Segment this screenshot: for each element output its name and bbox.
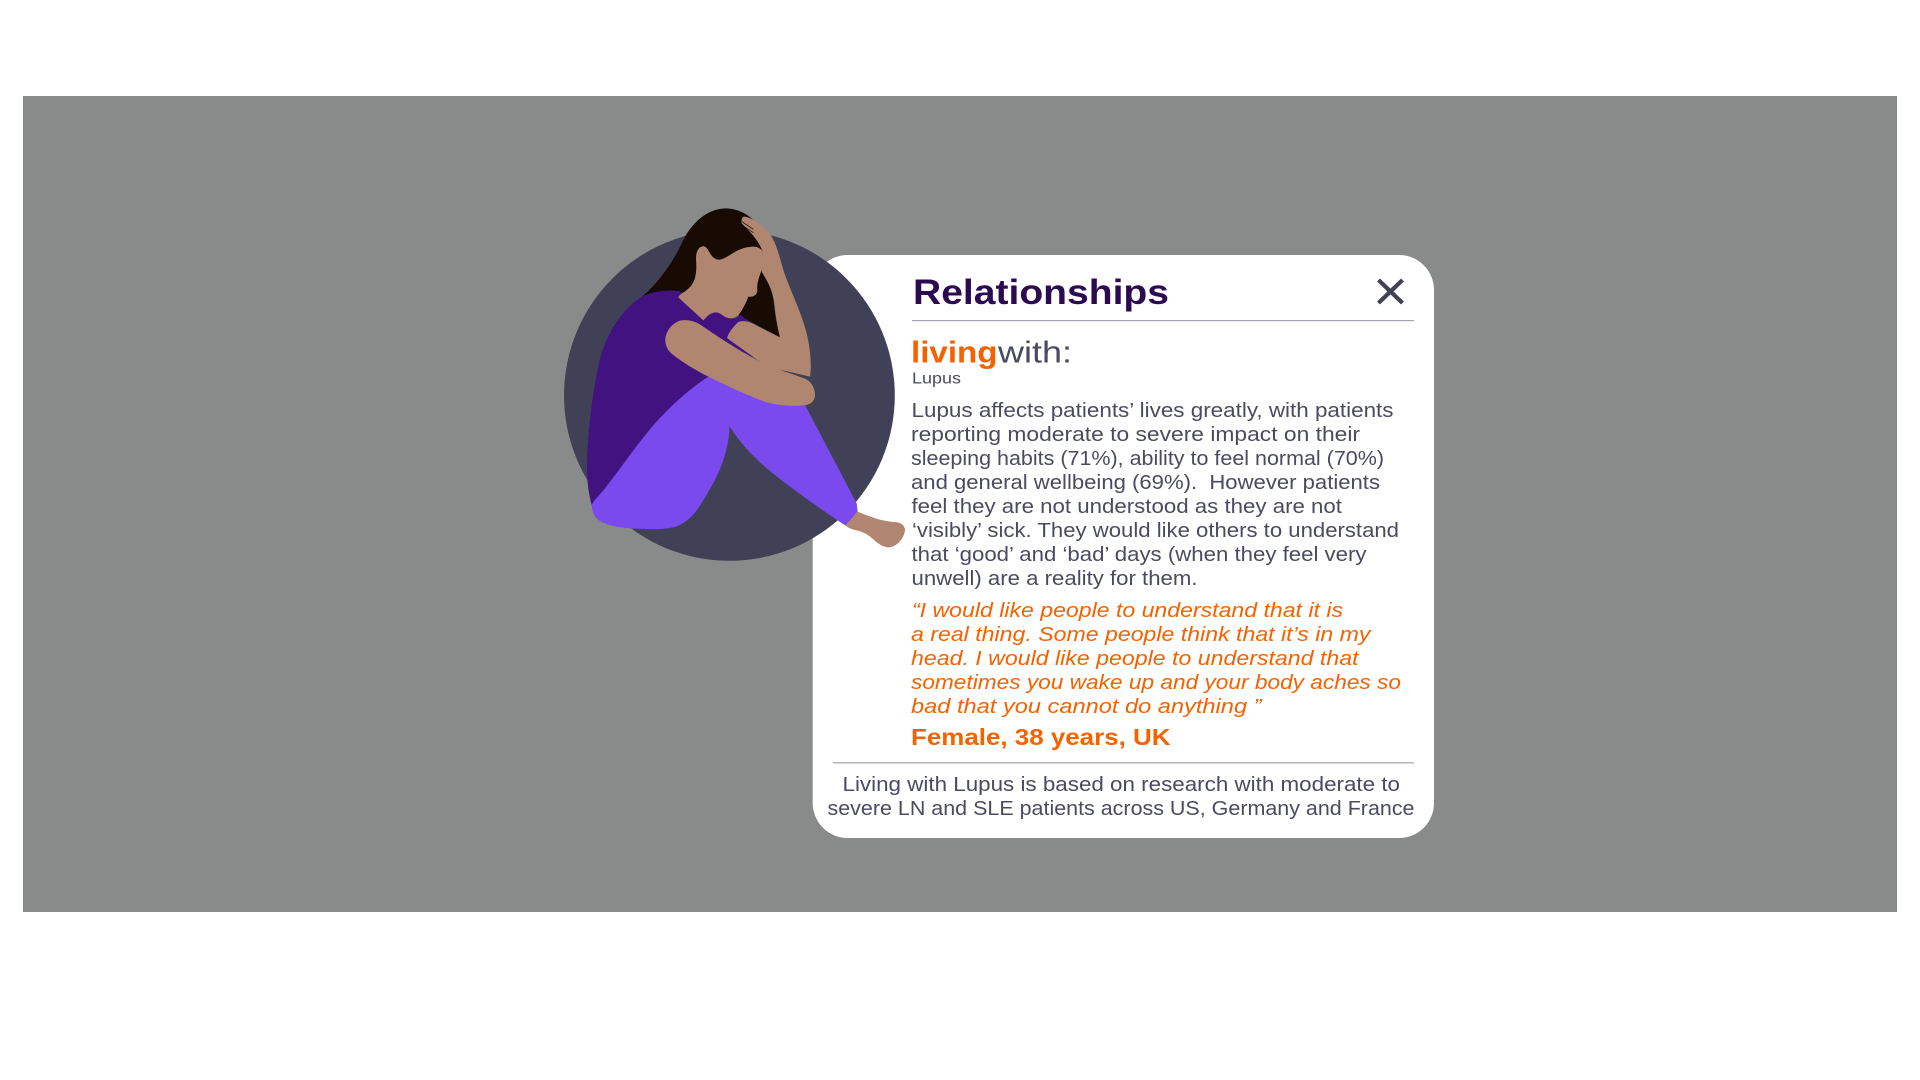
logo text: livingwith <box>911 335 1072 370</box>
icon: close X <box>1378 280 1402 303</box>
logo text: livingwith: with: <box>997 335 1072 370</box>
footer note: Living with Lupus is based on research with moderate to <box>842 773 1400 796</box>
patient quote: a real thing. Some people think that it’s in my <box>911 623 1372 646</box>
footer note: severe LN and SLE patients across US, Germany and France <box>828 797 1414 820</box>
body paragraph <box>911 399 1399 590</box>
body paragraph: ‘visibly’ sick. They would like others to understand <box>912 519 1399 542</box>
heading: Relationships: Relationships <box>913 273 1169 312</box>
face and neck <box>678 246 762 320</box>
folded forearm <box>665 320 815 406</box>
patient quote: head. I would like people to understand that <box>911 647 1360 670</box>
dark circle behind figure <box>564 230 895 561</box>
foot <box>846 512 905 547</box>
patient quote: “I would like people to understand that it is <box>912 599 1343 622</box>
body paragraph: Lupus affects patients’ lives greatly, with patients <box>912 399 1394 422</box>
raised arm and hand on head <box>727 217 811 377</box>
body paragraph: reporting moderate to severe impact on their <box>911 423 1360 446</box>
subtitle: Lupus: Lupus <box>912 371 961 388</box>
finger lines <box>742 222 753 233</box>
body paragraph: feel they are not understood as they are not <box>912 495 1342 518</box>
white card panel <box>813 255 1434 838</box>
footer note <box>828 773 1414 820</box>
illustration: seated woman holding her head <box>587 208 905 547</box>
body paragraph: unwell) are a reality for them. <box>912 567 1198 590</box>
quote attribution: Female, 38 years, UK <box>911 724 1171 750</box>
legs <box>592 377 858 529</box>
patient quote: sometimes you wake up and your body aches so <box>911 671 1401 694</box>
patient quote: bad that you cannot do anything ” <box>911 695 1263 718</box>
shirt <box>587 290 753 505</box>
hair <box>640 208 780 337</box>
body paragraph: and general wellbeing (69%). However patients <box>911 471 1380 494</box>
logo text: livingwith: living <box>911 335 998 370</box>
patient quote <box>911 599 1401 718</box>
body paragraph: sleeping habits (71%), ability to feel normal (70%) <box>911 447 1384 470</box>
grey background panel <box>23 96 1897 912</box>
body paragraph: that ‘good’ and ‘bad’ days (when they feel very <box>912 543 1367 566</box>
